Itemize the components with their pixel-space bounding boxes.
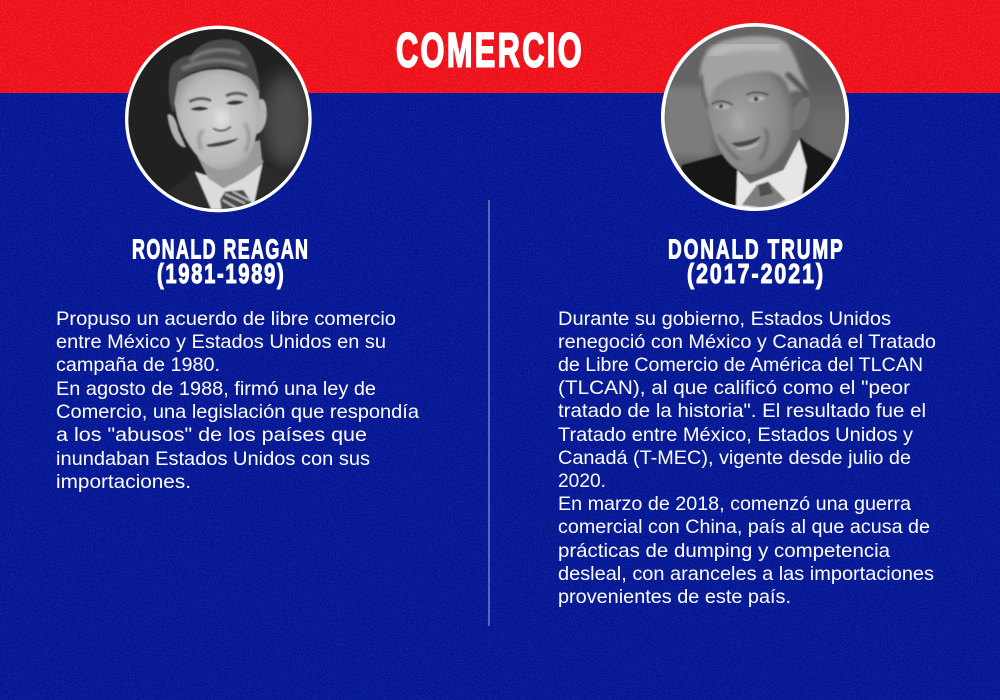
text block: Trump description: tratado de la historia". El resultado fue el xyxy=(558,400,926,422)
heading: Donald Trump: DONALD TRUMP xyxy=(668,234,843,266)
text block: Reagan description xyxy=(56,308,419,493)
heading: Donald Trump xyxy=(668,234,843,290)
text block: Trump description: comercial con China, país al que acusa de xyxy=(558,516,930,538)
text block: Trump description: desleal, con aranceles a las importaciones xyxy=(558,563,934,585)
text block: Reagan description: campaña de 1980. xyxy=(56,354,220,376)
heading: Ronald Reagan: (1981-1989) xyxy=(157,259,284,290)
heading: Ronald Reagan xyxy=(132,233,308,290)
text block: Trump description xyxy=(558,308,936,608)
text block: Reagan description: a los "abusos" de los países que xyxy=(56,424,367,446)
red header band xyxy=(0,0,1000,93)
heading: Donald Trump: (2017-2021) xyxy=(687,258,823,290)
portrait: Donald Trump xyxy=(660,20,853,213)
text block: Reagan description: Comercio, una legislación que respondía xyxy=(56,401,419,423)
text block: Trump description: Durante su gobierno, Estados Unidos xyxy=(558,308,891,330)
panel: Reagan xyxy=(56,233,419,493)
panel: Trump xyxy=(558,234,936,608)
text block: Reagan description: inundaban Estados Unidos con sus xyxy=(56,448,370,470)
portrait: Ronald Reagan xyxy=(123,23,317,217)
text block: Reagan description: importaciones. xyxy=(56,471,191,493)
text block: Trump description: prácticas de dumping y competencia xyxy=(558,540,890,562)
text block: Reagan description: entre México y Estados Unidos en su xyxy=(56,331,386,353)
text block: Trump description: de Libre Comercio de América del TLCAN xyxy=(558,354,923,376)
heading: Ronald Reagan: RONALD REAGAN xyxy=(132,233,308,264)
text block: Trump description: Canadá (T-MEC), vigente desde julio de xyxy=(558,447,911,469)
text block: Trump description: 2020. xyxy=(558,470,606,492)
text block: Trump description: provenientes de este país. xyxy=(558,586,791,608)
text block: Trump description: En marzo de 2018, comenzó una guerra xyxy=(558,493,911,515)
text block: Reagan description: Propuso un acuerdo de libre comercio xyxy=(56,308,396,330)
divider xyxy=(488,200,490,626)
title: COMERCIO xyxy=(396,24,582,77)
text block: Reagan description: En agosto de 1988, firmó una ley de xyxy=(56,378,376,400)
text block: Trump description: (TLCAN), al que calificó como el "peor xyxy=(558,377,911,399)
text block: Trump description: Tratado entre México, Estados Unidos y xyxy=(558,424,913,446)
text block: Trump description: renegoció con México y Canadá el Tratado xyxy=(558,331,936,353)
